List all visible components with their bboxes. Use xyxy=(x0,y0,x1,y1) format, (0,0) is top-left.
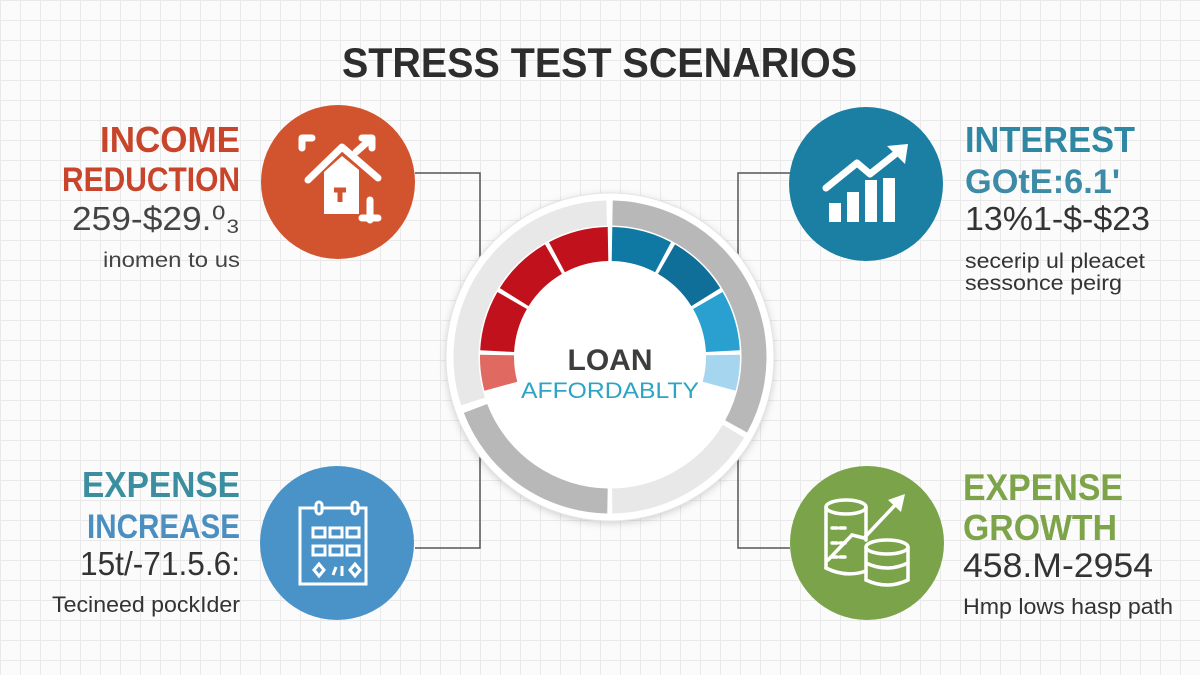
center gauge: loan affordability xyxy=(412,159,808,555)
panel: expense growth: Hmp lows hasp path xyxy=(963,594,1173,619)
panel: interest rate: 13%1-$-$23 xyxy=(965,200,1150,237)
panel: expense increase xyxy=(52,464,240,617)
blue segments xyxy=(612,227,740,391)
panel: expense growth: EXPENSE xyxy=(963,467,1123,508)
red segments xyxy=(480,227,608,391)
panel: expense increase: 15t/-71.5.6: xyxy=(80,545,240,582)
panel: interest rate: INTEREST xyxy=(965,119,1135,160)
panel: expense increase: EXPENSE xyxy=(82,464,240,505)
panel: interest rate xyxy=(965,119,1150,295)
panel: expense increase: INCREASE xyxy=(87,508,240,546)
panel: income reduction: REDUCTION xyxy=(62,161,240,199)
connector lines xyxy=(415,173,790,548)
icon: chart growth xyxy=(789,107,943,261)
gauge label: LOAN xyxy=(568,344,652,377)
panel: income reduction xyxy=(62,119,240,272)
icon: house with arrows xyxy=(261,105,415,259)
gauge label: AFFORDABLTY xyxy=(521,378,699,403)
panel: expense growth xyxy=(963,467,1173,619)
gauge label xyxy=(521,344,699,403)
panel: expense increase: Tecineed pockIder xyxy=(52,592,240,617)
panel: income reduction: INCOME xyxy=(100,119,240,160)
panel: income reduction: inomen to us xyxy=(103,249,240,272)
panel: interest rate: sessonce peirg xyxy=(965,272,1122,295)
icon: expense growth xyxy=(790,466,944,620)
panel: expense growth: 458.M-2954 xyxy=(963,547,1153,585)
panel: interest rate: secerip ul pleacet xyxy=(965,250,1145,273)
panel: interest rate: GOtE:6.1' xyxy=(965,163,1120,201)
panel: income reduction: 259-$29.⁰₃ xyxy=(72,200,240,237)
panel: expense growth: GROWTH xyxy=(963,507,1117,548)
title: STRESS TEST SCENARIOS xyxy=(342,39,857,86)
icon: calendar xyxy=(260,466,414,620)
